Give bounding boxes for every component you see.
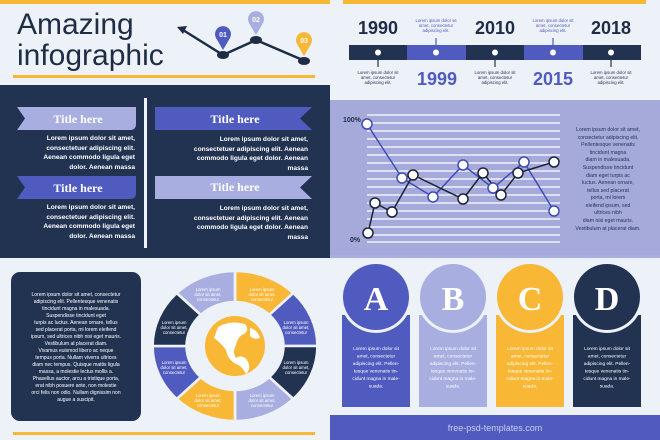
chart description: porta, mi lorem: [591, 195, 625, 201]
timeline: amet, consectetur: [594, 75, 629, 80]
chart: circular segments with globe: consectetur: [251, 403, 274, 408]
chart: circular segments with globe: consectetur: [197, 297, 220, 302]
panel: ABCD columns: [330, 255, 660, 407]
chart description: Vestibulum at placerat diam.: [575, 226, 641, 232]
timeline: adipiscing elit.: [422, 28, 450, 33]
panel: ABCD columns: tesque venenatis tin-: [431, 368, 476, 374]
ribbon 4: Lorem ipsum dolor sit amet,: [220, 205, 308, 212]
header: title area: [0, 0, 330, 78]
timeline: Lorem ipsum dolor sit: [532, 18, 574, 23]
timeline: adipiscing elit.: [482, 80, 508, 85]
panel: ABCD columns: amet, consectetur: [511, 354, 549, 360]
panel: ABCD columns: Lorem ipsum dolor sit: [584, 346, 631, 352]
panel: text box: massa, a molestie lectus mollis a.: [39, 369, 113, 375]
chart: circular segments with globe: Lorem ipsum: [162, 360, 187, 365]
panel: ABCD columns: Lorem ipsum dolor sit: [507, 346, 554, 352]
panel: ABCD columns: suada.: [369, 384, 383, 390]
ribbon 2: [17, 176, 136, 240]
ribbon 4: consectetuer adipiscing elit. Aenean: [194, 215, 308, 222]
chart: circular segments with globe: dolor sit amet,: [282, 365, 310, 370]
panel: text box: ipsum, sed ultrices nibh nisi eget mauris.: [31, 334, 121, 340]
ribbon 1: [17, 107, 136, 171]
panel: text box: adipiscing elit. Pellentesque venenatis: [34, 299, 119, 305]
chart description: diam eget turpis ac: [586, 173, 630, 179]
timeline: amet, consectetur: [478, 75, 513, 80]
ribbon 3: commodo ligula eget dolor. Aenean: [197, 155, 308, 162]
timeline: amet, consectetur: [361, 75, 396, 80]
timeline: [343, 0, 646, 89]
timeline: adipiscing elit.: [364, 80, 392, 85]
panel: navy ribbons: [0, 85, 330, 258]
panel: text box: tempus porta. Nullam viverra ultrices: [35, 355, 117, 361]
ribbon 4: massa: [287, 234, 308, 241]
ribbon 1: Aenean commodo ligula eget: [43, 154, 136, 161]
panel: text box: Lorem ipsum dolor sit amet, consectetur: [32, 292, 121, 298]
chart description: tellus sed placerat: [587, 188, 629, 194]
ribbon 4: commodo ligula eget dolor. Aenean: [197, 224, 308, 231]
column B: [417, 261, 489, 407]
column A: [340, 261, 412, 407]
ribbon 2: Lorem ipsum dolor sit amet,: [47, 204, 135, 211]
panel: text box: Suspendisse tincidunt eget: [46, 313, 106, 319]
column C: C: [518, 281, 542, 318]
panel: text box: Phasellus auctor, arcu a tristique porta,: [33, 376, 119, 382]
chart: circular segments with globe: Lorem ipsum: [250, 287, 275, 292]
panel: text box: diam nec tempus. Quisque mattis ligula: [32, 362, 120, 368]
panel: line chart: 0%: [350, 237, 361, 244]
icon: map pins line: 02: [252, 17, 260, 24]
chart description: luctus. Aenean ornare,: [582, 180, 634, 186]
ribbon 4: [155, 176, 312, 241]
panel: text box: augue a suscipit.: [57, 397, 95, 403]
title: Amazing: [17, 8, 134, 41]
icon: globe: [205, 316, 265, 376]
panel: ABCD columns: amet, consectetur: [434, 354, 472, 360]
panel: ABCD columns: suada.: [600, 384, 614, 390]
panel: line chart: 100%: [343, 117, 362, 124]
chart: circular segments with globe: Lorem ipsum: [284, 320, 309, 325]
timeline: amet, consectetur: [419, 23, 454, 28]
chart: circular segments with globe: consectetur: [197, 403, 220, 408]
panel: ABCD columns: tesque venenatis tin-: [354, 368, 399, 374]
chart: circular segments with globe: consectetur: [163, 330, 186, 335]
header: title area: infographic: [17, 39, 164, 72]
timeline: Lorem ipsum dolor sit: [590, 70, 632, 75]
panel: ABCD columns: adipiscing elit. Pellen-: [430, 361, 477, 367]
chart: circular segments with globe: dolor sit amet,: [160, 365, 188, 370]
column A: A: [364, 281, 389, 318]
timeline: amet, consectetur: [536, 23, 571, 28]
chart: circular segments with globe: consectetur: [285, 370, 308, 375]
ribbon 3: consectetuer adipiscing elit. Aenean: [194, 146, 308, 153]
ribbon 2: Title here: [53, 181, 103, 195]
column C: [494, 261, 566, 407]
chart: circular segments with globe: [152, 271, 318, 421]
ribbon 4: Title here: [210, 180, 260, 194]
footer: [330, 415, 660, 440]
panel: text box: Vestibulum at placerat diam.: [45, 341, 107, 347]
chart: circular segments with globe: consectetur: [163, 370, 186, 375]
timeline: adipiscing elit.: [540, 28, 566, 33]
chart description: tincidunt magna: [590, 150, 626, 156]
panel: text box: [11, 272, 141, 421]
column B: B: [442, 281, 464, 318]
chart: circular segments with globe: Lorem ipsum: [196, 393, 221, 398]
timeline: Lorem ipsum dolor sit: [415, 18, 457, 23]
panel: ABCD columns: amet, consectetur: [357, 354, 395, 360]
timeline: 1999: [417, 69, 457, 89]
ribbon 2: dolor. Aenean massa: [69, 233, 135, 240]
ribbon 1: consectetuer adipiscing elit.: [46, 145, 135, 152]
chart description: consectetur adipiscing elit.: [578, 135, 638, 141]
icon: map pins line: 03: [300, 38, 308, 45]
ribbon 2: Aenean commodo ligula eget: [43, 223, 136, 230]
panel: text box: Vivamus euismod libero ac neque: [39, 348, 114, 354]
timeline: Lorem ipsum dolor sit: [357, 70, 399, 75]
chart description: eleifend ipsum, sed: [586, 203, 630, 209]
ribbon 1: Title here: [53, 112, 103, 126]
ribbon 1: dolor. Aenean massa: [69, 164, 135, 171]
chart description: diam nisi eget mauris.: [583, 218, 633, 224]
panel: ABCD columns: amet, consectetur: [588, 354, 626, 360]
chart: circular segments with globe: Lorem ipsum: [250, 393, 275, 398]
chart: circular segments with globe: consectetur: [251, 297, 274, 302]
panel: text box: sed placerat porta, mi lorem eleifend: [36, 327, 117, 333]
chart: circular segments with globe: dolor sit amet,: [282, 325, 310, 330]
panel: ABCD columns: cidunt magna in male-: [352, 376, 400, 382]
icon: map pins line: [177, 11, 312, 65]
timeline: 2010: [475, 18, 515, 38]
chart: circular segments with globe: Lorem ipsum: [284, 360, 309, 365]
timeline: adipiscing elit.: [598, 80, 624, 85]
chart: circular segments with globe: consectetur: [285, 330, 308, 335]
ribbon 3: massa: [287, 165, 308, 172]
chart description: Suspendisse tincidunt: [583, 165, 634, 171]
panel: ABCD columns: adipiscing elit. Pellen-: [507, 361, 554, 367]
panel: line chart: [330, 100, 660, 255]
chart description: ultrices nibh: [594, 210, 622, 216]
chart description: Lorem ipsum dolor sit amet,: [576, 127, 640, 133]
panel: ABCD columns: suada.: [446, 384, 460, 390]
chart description: Pellentesque venenatis: [581, 142, 635, 148]
panel: ABCD columns: Lorem ipsum dolor sit: [353, 346, 400, 352]
ribbon 3: [155, 107, 312, 172]
footer: free-psd-templates.com: [448, 423, 542, 433]
panel: ABCD columns: tesque venenatis tin-: [508, 368, 553, 374]
panel: text box: erat nibh posuere ante, non molestie: [35, 383, 117, 389]
panel: ABCD columns: Lorem ipsum dolor sit: [430, 346, 477, 352]
chart: circular segments with globe: dolor sit amet,: [248, 292, 276, 297]
panel: ABCD columns: tesque venenatis tin-: [585, 368, 630, 374]
panel: ABCD columns: adipiscing elit. Pellen-: [353, 361, 400, 367]
panel: text box: tincidunt magna in malesuada.: [42, 306, 110, 312]
panel: text box: turpis ac luctus. Aenean ornare, tellus: [34, 320, 118, 326]
chart: circular segments with globe: dolor sit amet,: [194, 292, 222, 297]
column D: [571, 261, 643, 407]
ribbon 1: Lorem ipsum dolor sit amet,: [47, 135, 135, 142]
panel: ABCD columns: adipiscing elit. Pellen-: [584, 361, 631, 367]
panel: text box: orci felis non odio. Nullam dignissim non: [31, 390, 121, 396]
timeline: 2018: [591, 18, 631, 38]
chart: circular segments with globe: dolor sit amet,: [194, 398, 222, 403]
timeline: 1990: [358, 18, 398, 38]
chart: circular segments with globe: Lorem ipsum: [196, 287, 221, 292]
chart: circular segments with globe: dolor sit amet,: [248, 398, 276, 403]
panel: ABCD columns: suada.: [523, 384, 537, 390]
ribbon 2: consectetuer adipiscing elit.: [46, 214, 135, 221]
panel: ABCD columns: cidunt magna in male-: [583, 376, 631, 382]
chart description: [575, 127, 641, 232]
chart description: diam in malesuada.: [586, 157, 630, 163]
ribbon 3: Title here: [210, 112, 260, 126]
timeline: 2015: [533, 69, 573, 89]
chart: circular segments with globe: Lorem ipsum: [162, 320, 187, 325]
panel: ABCD columns: cidunt magna in male-: [429, 376, 477, 382]
panel: ABCD columns: cidunt magna in male-: [506, 376, 554, 382]
ribbon 3: Lorem ipsum dolor sit amet,: [220, 136, 308, 143]
timeline: Lorem ipsum dolor sit: [474, 70, 516, 75]
icon: map pins line: 01: [219, 32, 227, 39]
chart: circular segments with globe: dolor sit amet,: [160, 325, 188, 330]
column D: D: [595, 281, 619, 318]
